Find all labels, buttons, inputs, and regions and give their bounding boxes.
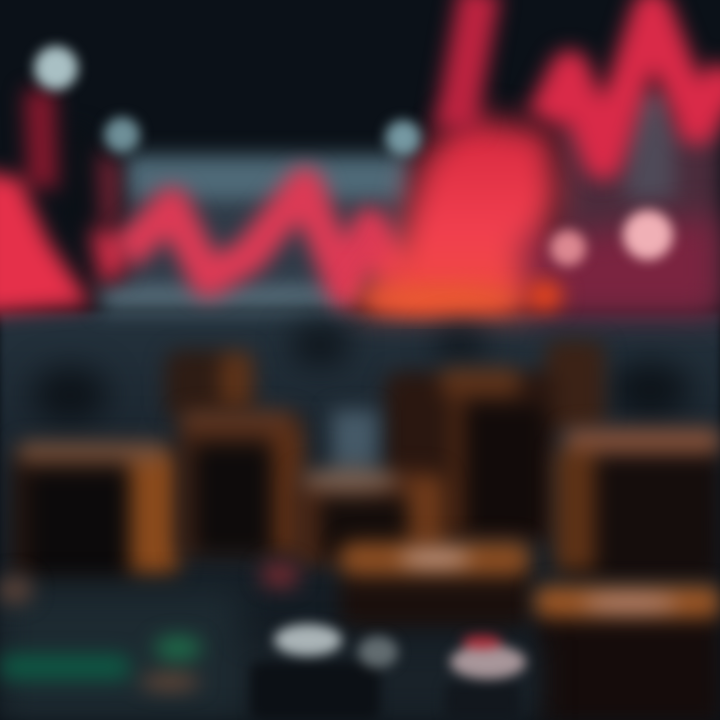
- chart: right red mass: [350, 115, 720, 315]
- coins: second stack: [178, 410, 304, 557]
- panel: lower scene background: [0, 312, 720, 720]
- foreground: green and red highlights: [0, 562, 300, 690]
- coins: left stack: [12, 442, 180, 580]
- panel: dark blotches in lower background: [32, 325, 690, 423]
- coins: centre stack: [295, 410, 445, 565]
- coins: back stacks: [165, 340, 605, 542]
- panel: slate band behind chart: [100, 90, 720, 311]
- coins: front centre stack: [340, 540, 530, 630]
- chart: orange base glow: [360, 281, 563, 315]
- foreground: white and red objects: [250, 624, 526, 720]
- coins: right stack: [555, 428, 720, 580]
- chart: left red peak area: [0, 90, 130, 314]
- chart: right red spikes: [455, 0, 720, 160]
- foreground: dark slate base: [0, 590, 540, 720]
- coins: front right stack: [535, 586, 720, 720]
- chart: glowing data points: [34, 46, 673, 266]
- chart: middle red zigzag line: [125, 185, 400, 290]
